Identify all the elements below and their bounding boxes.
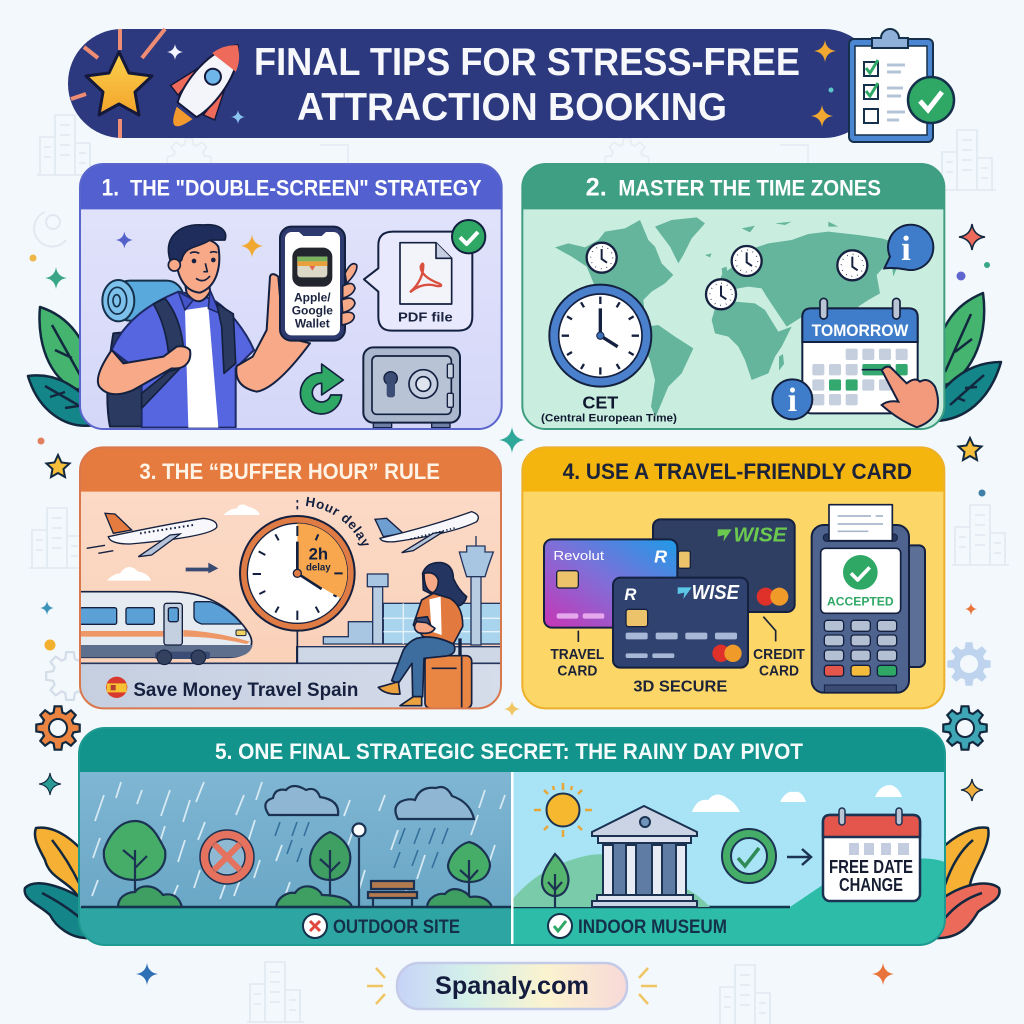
right scene: clear sky [512, 772, 945, 907]
icon: arrow [186, 563, 218, 573]
icon: front card 3D secure: WISE [692, 582, 740, 604]
icon: info circle [772, 379, 812, 419]
icon: Revolut card: R [654, 547, 667, 567]
strip and ground [80, 664, 501, 708]
decorative gears, stars and dots [30, 224, 991, 985]
text: CET label: CET [582, 392, 618, 412]
icon: delay clock: 2h [309, 544, 328, 563]
icon: dark Wise card: WISE [733, 524, 788, 547]
heading 2 [522, 164, 944, 209]
icon: dark Wise card [653, 519, 795, 612]
heading 3: 3. THE “BUFFER HOUR” RULE [139, 459, 440, 484]
text: CET label [541, 392, 677, 424]
icon: blue-tail plane [375, 512, 478, 553]
clouds on right [692, 785, 902, 812]
divider [511, 772, 514, 945]
heading 5: 5. ONE FINAL STRATEGIC SECRET: THE RAINY DAY PIVOT [215, 739, 804, 764]
icon: CET clock [549, 285, 651, 387]
panel 3: buffer hour [79, 446, 502, 710]
icon: orange-tail plane [87, 513, 217, 557]
label: outdoor site: OUTDOOR SITE [333, 917, 460, 938]
icon: info bubble: i [901, 229, 911, 268]
icon: museum [592, 806, 697, 907]
card labels: 3D SECURE [633, 678, 728, 695]
heading 3 [80, 447, 501, 492]
panel 4: travel-friendly card [522, 447, 944, 708]
heading 2: 2. [586, 174, 607, 202]
icon: delay clock [239, 496, 369, 632]
decorative leaves: upper right [930, 293, 1001, 421]
icon: delay clock: Hour delay [306, 496, 369, 546]
icon: star [86, 52, 152, 115]
panel 5: rainy day pivot [79, 728, 945, 945]
icon: trees and bushes [104, 821, 492, 907]
icon: green refresh arrow [300, 364, 343, 414]
icon: phone with wallet [280, 227, 357, 341]
icon: payment terminal: ACCEPTED [827, 594, 894, 608]
callout: PDF file [364, 220, 485, 331]
icon: phone with wallet: Wallet [295, 317, 330, 331]
card labels: CARD [759, 664, 799, 680]
icon: delay clock: delay [306, 563, 331, 574]
icon: small world clocks [587, 243, 867, 309]
icon: front card 3D secure [613, 578, 748, 668]
title banner: ATTRACTION BOOKING [297, 86, 727, 129]
right hills [512, 854, 710, 907]
decorative leaves: lower left [25, 828, 92, 938]
icon: info bubble [884, 225, 933, 270]
text: CET label: (Central European Time) [541, 412, 677, 424]
icon: sun [534, 783, 592, 837]
title text: FINAL TIPS FOR STRESS-FREE [254, 41, 800, 84]
rain lines [92, 782, 505, 899]
icon: lamp post and bench [352, 824, 417, 907]
decorative leaves: upper left [28, 307, 100, 426]
icon: train [80, 592, 253, 665]
icon: free date change calendar: FREE DATE [829, 857, 913, 877]
footer: Spanaly.com badge: Spanaly.com [435, 972, 589, 1000]
icon: pointing hand [882, 367, 938, 427]
chart: world map [555, 217, 898, 417]
label: outdoor site [303, 914, 460, 938]
arrow [787, 849, 811, 865]
ground line [81, 906, 790, 908]
icon: tomorrow calendar [802, 298, 918, 413]
heading 5 [79, 728, 945, 772]
icon: clipboard checklist [849, 29, 954, 142]
icon: free date change calendar [823, 808, 920, 901]
heading 4: 4. USE A TRAVEL-FRIENDLY CARD [563, 459, 912, 484]
callout: PDF file: PDF file [398, 310, 453, 325]
card labels [550, 617, 805, 695]
icon: prohibited sign [200, 830, 254, 884]
icon: rain clouds [265, 786, 474, 819]
cloud shapes [107, 505, 260, 581]
ground strips [79, 907, 512, 945]
icon: Revolut card: Revolut [553, 548, 604, 563]
airport tower and terminal [297, 536, 502, 667]
title banner [68, 28, 954, 143]
heading 4 [522, 447, 944, 492]
icon: front card 3D secure: R [624, 585, 636, 604]
decorative leaves: lower right [932, 827, 1000, 938]
panel 2: time zones [522, 164, 944, 429]
label: indoor museum [548, 914, 727, 938]
icon: info circle: i [788, 382, 797, 419]
icon: phone with wallet: Google [292, 304, 333, 318]
icon: rocket [153, 28, 260, 143]
illustration: woman on suitcase [378, 563, 472, 708]
card labels: CREDIT [753, 647, 805, 663]
icon: tomorrow calendar: TOMORROW [812, 321, 909, 340]
illustration: traveller with backpack [98, 225, 310, 428]
icon: Revolut card [544, 539, 677, 628]
label: indoor museum: INDOOR MUSEUM [578, 917, 727, 938]
heading 2: MASTER THE TIME ZONES [618, 176, 881, 201]
icon: safe [363, 347, 460, 428]
footer: Spanaly.com badge [367, 963, 657, 1009]
text: Save Money Travel Spain: Save Money Travel Spain [133, 680, 358, 701]
panel 1: double-screen strategy [80, 164, 502, 429]
heading 1 [80, 164, 502, 209]
star rays [71, 29, 165, 138]
icon: phone with wallet: Apple/ [294, 291, 331, 305]
card labels: CARD [557, 664, 597, 680]
heading 1: THE "DOUBLE-SCREEN" STRATEGY [130, 176, 482, 201]
icon: payment terminal [812, 505, 925, 693]
icon: small tree [542, 854, 568, 907]
card labels: TRAVEL [550, 647, 605, 663]
left scene: rainy sky [79, 772, 512, 907]
icon: free date change calendar: CHANGE [839, 875, 903, 895]
heading 1: 1. [102, 175, 119, 202]
icon: green check badge [722, 829, 776, 883]
